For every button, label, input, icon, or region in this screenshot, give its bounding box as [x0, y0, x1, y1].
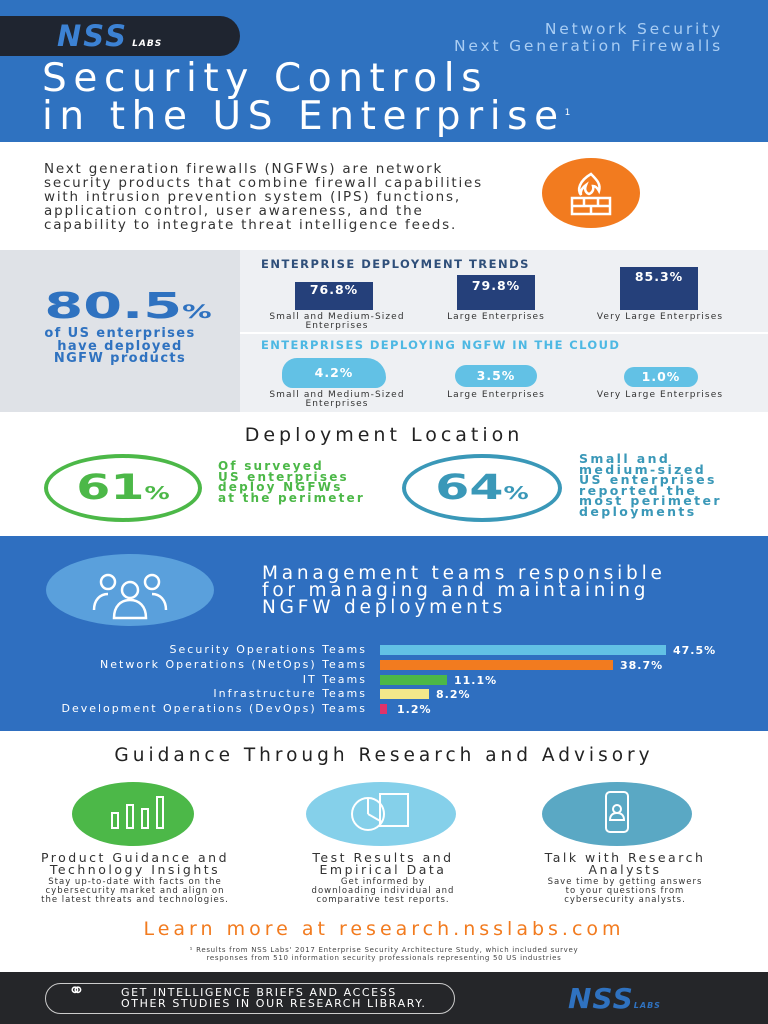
- bar chart: Security Operations Teams: [170, 643, 367, 656]
- card 1: Product Guidance and: [41, 850, 229, 865]
- link: Learn more at research.nsslabs.com: [143, 918, 625, 940]
- panel: stats: Large Enterprises: [447, 312, 545, 322]
- intro text: with intrusion prevention system (IPS) functions,: [44, 189, 461, 205]
- cloud 1: [282, 358, 386, 388]
- cta button: GET INTELLIGENCE BRIEFS AND ACCESS: [121, 986, 397, 999]
- cta button: [45, 983, 455, 1014]
- footnote: ¹ Results from NSS Labs' 2017 Enterprise Security Architecture Study, which included survey: [190, 946, 578, 954]
- panel: stats: Enterprises: [305, 399, 369, 409]
- card 1: cybersecurity market and align on: [45, 886, 225, 896]
- building 1: 76.8%: [310, 282, 358, 297]
- logo pill: [0, 16, 240, 56]
- logo pill: NSS LABS: [57, 19, 162, 53]
- building 3: 85.3%: [635, 269, 683, 284]
- text 64: medium-sized: [579, 462, 706, 476]
- panel: stats: Very Large Enterprises: [597, 312, 723, 322]
- footnote: responses from 510 information security professionals representing 50 US industries: [206, 954, 562, 962]
- building 3: [620, 267, 698, 310]
- bar chart: 1.2%: [397, 703, 432, 716]
- heading trends: ENTERPRISE DEPLOYMENT TRENDS: [261, 257, 530, 271]
- bar chart: 47.5%: [673, 644, 716, 657]
- icon: bar chart: [72, 782, 194, 846]
- card 2: downloading individual and: [312, 886, 454, 896]
- icon: firewall: [542, 158, 640, 228]
- title: [42, 56, 570, 139]
- bar chart: 11.1%: [454, 674, 497, 687]
- card 3: cybersecurity analysts.: [564, 895, 686, 905]
- bar chart: Network Operations (NetOps) Teams: [100, 658, 367, 671]
- heading: deployment location: Deployment Location: [245, 424, 523, 446]
- heading cloud: ENTERPRISES DEPLOYING NGFW IN THE CLOUD: [261, 338, 620, 352]
- text 64: [579, 451, 722, 518]
- card 2: Get informed by: [341, 877, 425, 887]
- big stat: [0, 250, 240, 412]
- building 2: 79.8%: [472, 278, 520, 293]
- card 3: Analysts: [589, 862, 661, 877]
- logo footer: NSSLABS: [568, 982, 661, 1015]
- cta button: ⚭: [68, 978, 85, 1002]
- card 1: [41, 782, 229, 905]
- icon: tablet: [542, 782, 692, 846]
- ring 64: [402, 454, 562, 522]
- footnote: [190, 946, 578, 962]
- panel: stats: Small and Medium-Sized: [269, 390, 405, 400]
- header: [0, 0, 768, 142]
- text 64: deployments: [579, 504, 697, 518]
- bar chart: 38.7%: [620, 659, 663, 672]
- text 61: deploy NGFWs: [218, 480, 343, 494]
- icon: team: [46, 554, 214, 626]
- card 2: [306, 782, 456, 905]
- text 61: US enterprises: [218, 470, 349, 484]
- panel: management: [0, 536, 768, 731]
- heading: NGFW deployments: [262, 597, 506, 618]
- heading: [262, 563, 666, 618]
- text 61: [218, 459, 365, 504]
- cta button: OTHER STUDIES IN OUR RESEARCH LIBRARY.: [121, 997, 426, 1010]
- cloud 3: 1.0%: [642, 369, 680, 384]
- card 1: the latest threats and technologies.: [41, 895, 229, 905]
- cloud 2: 3.5%: [477, 368, 515, 383]
- text 61: at the perimeter: [218, 490, 365, 504]
- heading: for managing and maintaining: [262, 580, 649, 601]
- big stat: 80.5%: [44, 286, 212, 327]
- panel: stats: Large Enterprises: [447, 390, 545, 400]
- card 3: to your questions from: [566, 886, 684, 896]
- panel: stats: Very Large Enterprises: [597, 390, 723, 400]
- intro text: Next generation firewalls (NGFWs) are network: [44, 161, 443, 177]
- ring 61: 61%: [76, 468, 170, 508]
- text 64: Small and: [579, 451, 670, 466]
- bar chart: Development Operations (DevOps) Teams: [61, 702, 367, 715]
- title: in the US Enterprise1: [42, 94, 570, 139]
- card 1: Stay up-to-date with facts on the: [48, 877, 222, 887]
- bar chart: IT Teams: [303, 673, 367, 686]
- subtitle: Next Generation Firewalls: [454, 37, 723, 55]
- big stat: have deployed: [57, 338, 183, 354]
- panel: stats: Enterprises: [305, 321, 369, 331]
- bar chart: Infrastructure Teams: [213, 687, 367, 700]
- cloud 2: [455, 365, 537, 387]
- intro text: security products that combine firewall capabilities: [44, 175, 483, 191]
- card 3: [542, 782, 705, 905]
- building 2: [457, 275, 535, 310]
- card 1: Technology Insights: [50, 862, 220, 877]
- card 2: comparative test reports.: [316, 895, 450, 905]
- ring 64: 64%: [435, 468, 529, 508]
- subtitle: Network Security: [545, 20, 723, 38]
- intro text: [44, 161, 483, 233]
- intro text: application control, user awareness, and the: [44, 203, 424, 219]
- panel: stats: Small and Medium-Sized: [269, 312, 405, 322]
- bar chart: [61, 643, 716, 716]
- intro text: capability to integrate threat intelligence feeds.: [44, 217, 457, 233]
- subtitle: [454, 20, 723, 55]
- title: Security Controls: [42, 56, 488, 101]
- building 1: [295, 282, 373, 310]
- cloud 3: [624, 367, 698, 387]
- heading: guidance: Guidance Through Research and Advisory: [114, 745, 654, 766]
- text 64: most perimeter: [579, 493, 722, 508]
- ring 61: [44, 454, 202, 522]
- footer: [0, 972, 768, 1024]
- card 3: Save time by getting answers: [548, 877, 702, 887]
- icon: report: [306, 782, 456, 846]
- bar chart: 8.2%: [436, 688, 471, 701]
- panel: stats: [0, 250, 768, 412]
- text 61: Of surveyed: [218, 459, 324, 473]
- heading: Management teams responsible: [262, 563, 666, 584]
- big stat: of US enterprises: [44, 326, 196, 341]
- card 2: Empirical Data: [320, 862, 446, 877]
- text 64: reported the: [579, 482, 697, 498]
- cloud 1: 4.2%: [315, 365, 353, 380]
- text 64: US enterprises: [579, 472, 717, 487]
- big stat: NGFW products: [54, 351, 186, 366]
- card 3: Talk with Research: [545, 850, 705, 865]
- card 2: Test Results and: [312, 850, 454, 865]
